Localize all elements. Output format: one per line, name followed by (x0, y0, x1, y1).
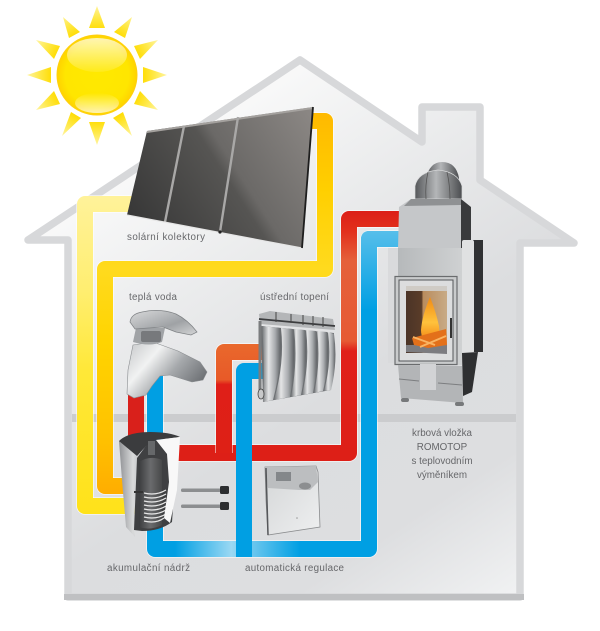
label: central heating: ústřední topení (260, 292, 329, 303)
pipe: inner yellow solar flow (105, 121, 325, 486)
sun (27, 6, 167, 145)
automatic controller (265, 466, 320, 535)
heat exchanger box (398, 199, 471, 249)
pipe: red faucet feed (128, 385, 144, 445)
house outline (28, 60, 574, 600)
label: fireplace insert: výměníkem (417, 470, 467, 481)
label: hot water: teplá voda (129, 292, 178, 303)
radiator (258, 311, 335, 402)
label: solar collectors: solární kolektory (127, 232, 205, 243)
label: fireplace insert: ROMOTOP (417, 442, 468, 453)
stove body (388, 240, 483, 396)
electric heating rods (181, 486, 229, 510)
sun disc (56, 34, 138, 116)
label: automatic control: automatická regulace (245, 563, 345, 574)
faucet (127, 310, 207, 398)
pipe: outer yellow solar return (85, 204, 150, 506)
label: accumulation tank: akumulační nádrž (107, 563, 190, 574)
pipe: blue return loop (155, 231, 410, 557)
stove base (398, 364, 464, 406)
flue dome (415, 162, 462, 199)
sun rays (27, 6, 167, 145)
label: fireplace insert: s teplovodním (412, 456, 472, 467)
fireplace insert (388, 162, 483, 406)
label: fireplace insert (412, 428, 472, 481)
pipe: blue radiator return (244, 371, 265, 557)
solar collectors (127, 107, 313, 248)
accumulation tank (119, 432, 180, 537)
pipe: red radiator flow (224, 352, 265, 453)
label: fireplace insert: krbová vložka (412, 428, 472, 439)
fireplace door (395, 276, 457, 364)
pipe: red fireplace flow (170, 219, 410, 453)
